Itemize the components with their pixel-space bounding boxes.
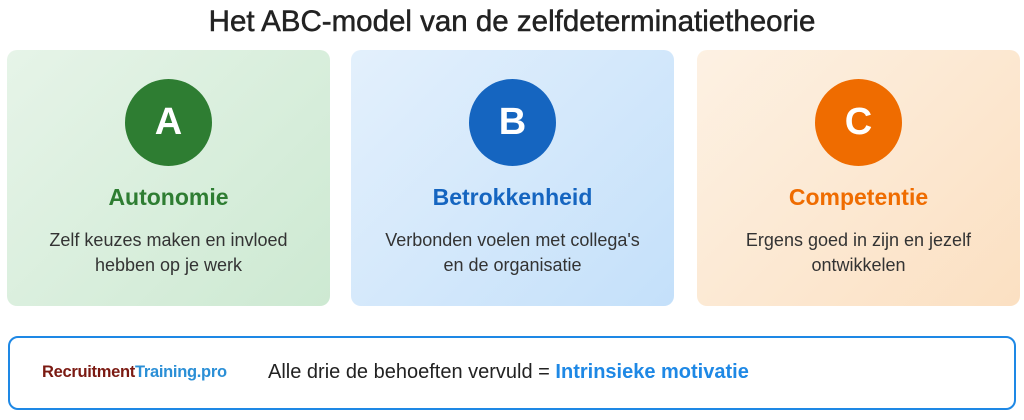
icon: circle A: A [155,101,182,143]
icon: circle C: C [845,101,872,143]
text: autonomie description: Zelf keuzes maken en invloed [49,230,288,250]
icon: circle A [125,79,212,166]
text: autonomie description [49,230,288,275]
text: betrokkenheid description [385,230,640,275]
icon: circle B [469,79,556,166]
title: Het ABC-model van de zelfdeterminatietheorie [209,5,815,38]
text: competentie description [746,230,972,275]
logo: RecruitmentTraining.pro [42,363,227,381]
panel: autonomie [7,50,330,306]
heading: Autonomie: Autonomie [108,184,229,210]
panel: competentie [697,50,1020,306]
heading: Betrokkenheid: Betrokkenheid [433,184,592,210]
panel: betrokkenheid [351,50,674,306]
text: betrokkenheid description: en de organisatie [443,255,582,275]
text: competentie description: Ergens goed in zijn en jezelf [746,230,971,250]
icon: circle B: B [499,101,526,143]
icon: circle C [815,79,902,166]
text: autonomie description: hebben op je werk [95,255,242,275]
heading: Competentie: Competentie [789,184,928,210]
text: conclusion: Alle drie de behoeften vervuld = Intrinsieke motivatie [268,361,749,383]
text: betrokkenheid description: Verbonden voelen met collega's [385,230,640,250]
callout: bottom conclusion [8,336,1016,410]
text: competentie description: ontwikkelen [811,255,906,275]
